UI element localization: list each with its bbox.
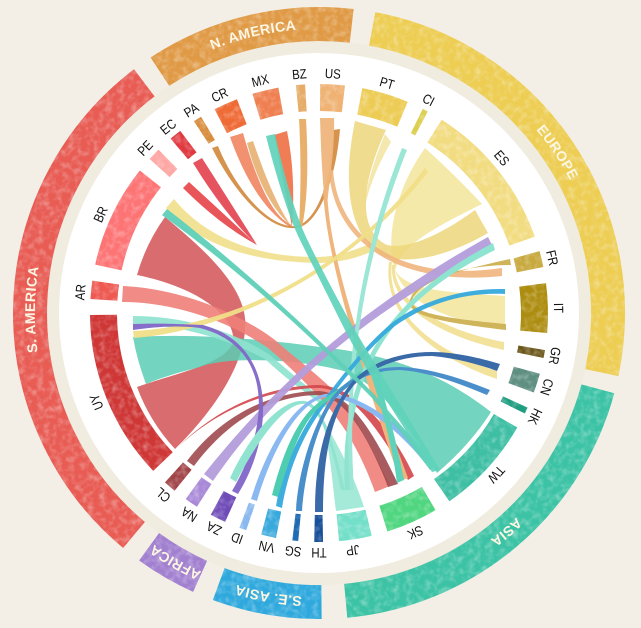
- ribbon: ES to IT: [392, 260, 505, 328]
- segment: US: [320, 98, 343, 99]
- segment: EC: [179, 142, 188, 149]
- label: Europe: EUROPE: [536, 124, 578, 180]
- label: SK: SK: [405, 522, 425, 542]
- country ring: [104, 98, 534, 529]
- ribbon: teal to SK: [372, 378, 404, 483]
- ribbon: NA purple: [204, 237, 493, 481]
- country labels: [72, 66, 566, 560]
- label: PA: PA: [181, 100, 202, 121]
- segment: BZ: [297, 84, 306, 112]
- label: Asia: ASIA: [490, 518, 520, 545]
- ribbon: VN teal: [272, 372, 362, 497]
- segment: ZA: [217, 503, 231, 510]
- ribbon: PE: [183, 182, 257, 245]
- segment: AR: [104, 283, 106, 300]
- region arc: Asia: [346, 389, 598, 601]
- ribbon: PT lighter strand: [363, 134, 391, 218]
- segment: FR: [526, 255, 530, 270]
- ribbon: UY to SK red: [178, 385, 414, 480]
- label: ES: ES: [491, 148, 512, 169]
- ribbon: US main: [320, 118, 334, 215]
- label: TW: TW: [484, 462, 508, 486]
- ribbon: UY light teal: [133, 316, 330, 408]
- segment: PT: [360, 101, 402, 114]
- label: CI: CI: [420, 91, 437, 109]
- label: CL: CL: [153, 484, 174, 505]
- ribbon: ZA to JP light teal: [230, 401, 345, 490]
- segment: SG: [294, 514, 300, 541]
- ribbon: MX teal strip: [266, 134, 440, 472]
- ribbon: BR teal strip: [162, 209, 436, 470]
- label: GR: GR: [545, 346, 563, 366]
- ribbon: UY to ES thin yellow: [133, 168, 428, 338]
- segment: UY: [104, 315, 163, 462]
- label: MX: MX: [250, 71, 271, 90]
- ribbon: US to SK: [323, 190, 408, 481]
- ribbon: BZ: [299, 119, 307, 227]
- ribbon: PT to ES: [349, 121, 488, 259]
- segment: BR: [108, 179, 150, 268]
- segment: JP: [338, 523, 369, 528]
- ribbon: UY to TW: [133, 336, 491, 473]
- segment: GR: [530, 348, 532, 355]
- segment: IT: [533, 285, 534, 332]
- region arc: N. America: [160, 24, 352, 72]
- label: TH: TH: [311, 545, 327, 560]
- label: FR: FR: [543, 249, 561, 267]
- segment: VN: [265, 522, 279, 525]
- label: CR: CR: [209, 85, 230, 106]
- segment: TH: [314, 515, 323, 542]
- segment: CL: [174, 472, 183, 480]
- ribbon: BZ tan strand: [247, 141, 291, 226]
- segment: MX: [256, 101, 281, 107]
- ribbon: ES to GR: [392, 265, 504, 350]
- ribbon: BR to PT yellow: [166, 199, 380, 263]
- ribbon: AR to SK: [122, 286, 390, 492]
- label: US: US: [324, 66, 341, 82]
- ribbon: SG: [296, 367, 490, 511]
- ribbon: TH: [315, 352, 500, 512]
- ribbon: US to ES gap: [329, 170, 502, 278]
- segment: ID: [244, 515, 251, 517]
- label: PT: PT: [378, 74, 396, 93]
- label: SG: SG: [284, 543, 302, 559]
- segment: NA: [194, 488, 204, 495]
- label: Africa: AFRICA: [152, 544, 202, 579]
- ribbon: CI to JP teal: [348, 148, 407, 490]
- label: EC: EC: [157, 116, 179, 138]
- ribbon: MX coral: [274, 131, 293, 227]
- ribbon: ES funnel: [391, 148, 482, 270]
- segment: CI: [417, 121, 422, 123]
- segment: ES: [434, 131, 522, 241]
- label: BR: BR: [91, 204, 111, 225]
- chord ribbons: [122, 118, 511, 512]
- label: UY: UY: [87, 391, 107, 412]
- region arc: S. America: [30, 83, 144, 535]
- region arc: S.E. Asia: [219, 584, 322, 602]
- label: PE: PE: [135, 138, 156, 159]
- segment: SK: [383, 498, 429, 519]
- region arc: Europe: [372, 29, 608, 373]
- label: IT: IT: [551, 303, 566, 314]
- label: S. America: S. AMERICA: [25, 268, 38, 352]
- label: VN: VN: [257, 537, 276, 556]
- ribbon: JP wedge: [320, 414, 364, 511]
- segment: HK: [513, 402, 515, 408]
- ribbon: CL to SK: [187, 391, 398, 487]
- ribbon: EC: [193, 158, 257, 245]
- segment: TW: [442, 421, 506, 490]
- ribbon: FR olive strand: [410, 259, 511, 330]
- ribbon: VN to IT: [276, 289, 505, 508]
- region arc: Africa: [149, 547, 200, 576]
- ribbon: ID light blue: [251, 394, 429, 501]
- white disc: [59, 53, 579, 573]
- label: N. America: N. AMERICA: [210, 20, 296, 50]
- ribbon: CR: [230, 133, 292, 227]
- label: BZ: BZ: [291, 66, 308, 83]
- label: S.E. Asia: S.E. ASIA: [237, 585, 302, 606]
- ribbon: BR to UY: [137, 217, 245, 449]
- label: AR: AR: [72, 284, 89, 301]
- segment: PA: [201, 128, 208, 132]
- label: JP: JP: [345, 542, 360, 558]
- label: ZA: ZA: [204, 518, 224, 538]
- label: CN: CN: [537, 377, 556, 397]
- ribbon: PA to US: [212, 129, 340, 228]
- ribbon: ES to CN: [388, 262, 497, 379]
- label: ID: ID: [229, 529, 245, 547]
- label: NA: NA: [178, 503, 200, 525]
- segment: PE: [160, 159, 168, 168]
- ribbon: ZA purple: [133, 324, 263, 494]
- segment: CN: [521, 370, 527, 388]
- ribbon: JP to ES teal: [344, 243, 495, 490]
- label: HK: HK: [524, 406, 545, 427]
- segment: CR: [221, 112, 242, 121]
